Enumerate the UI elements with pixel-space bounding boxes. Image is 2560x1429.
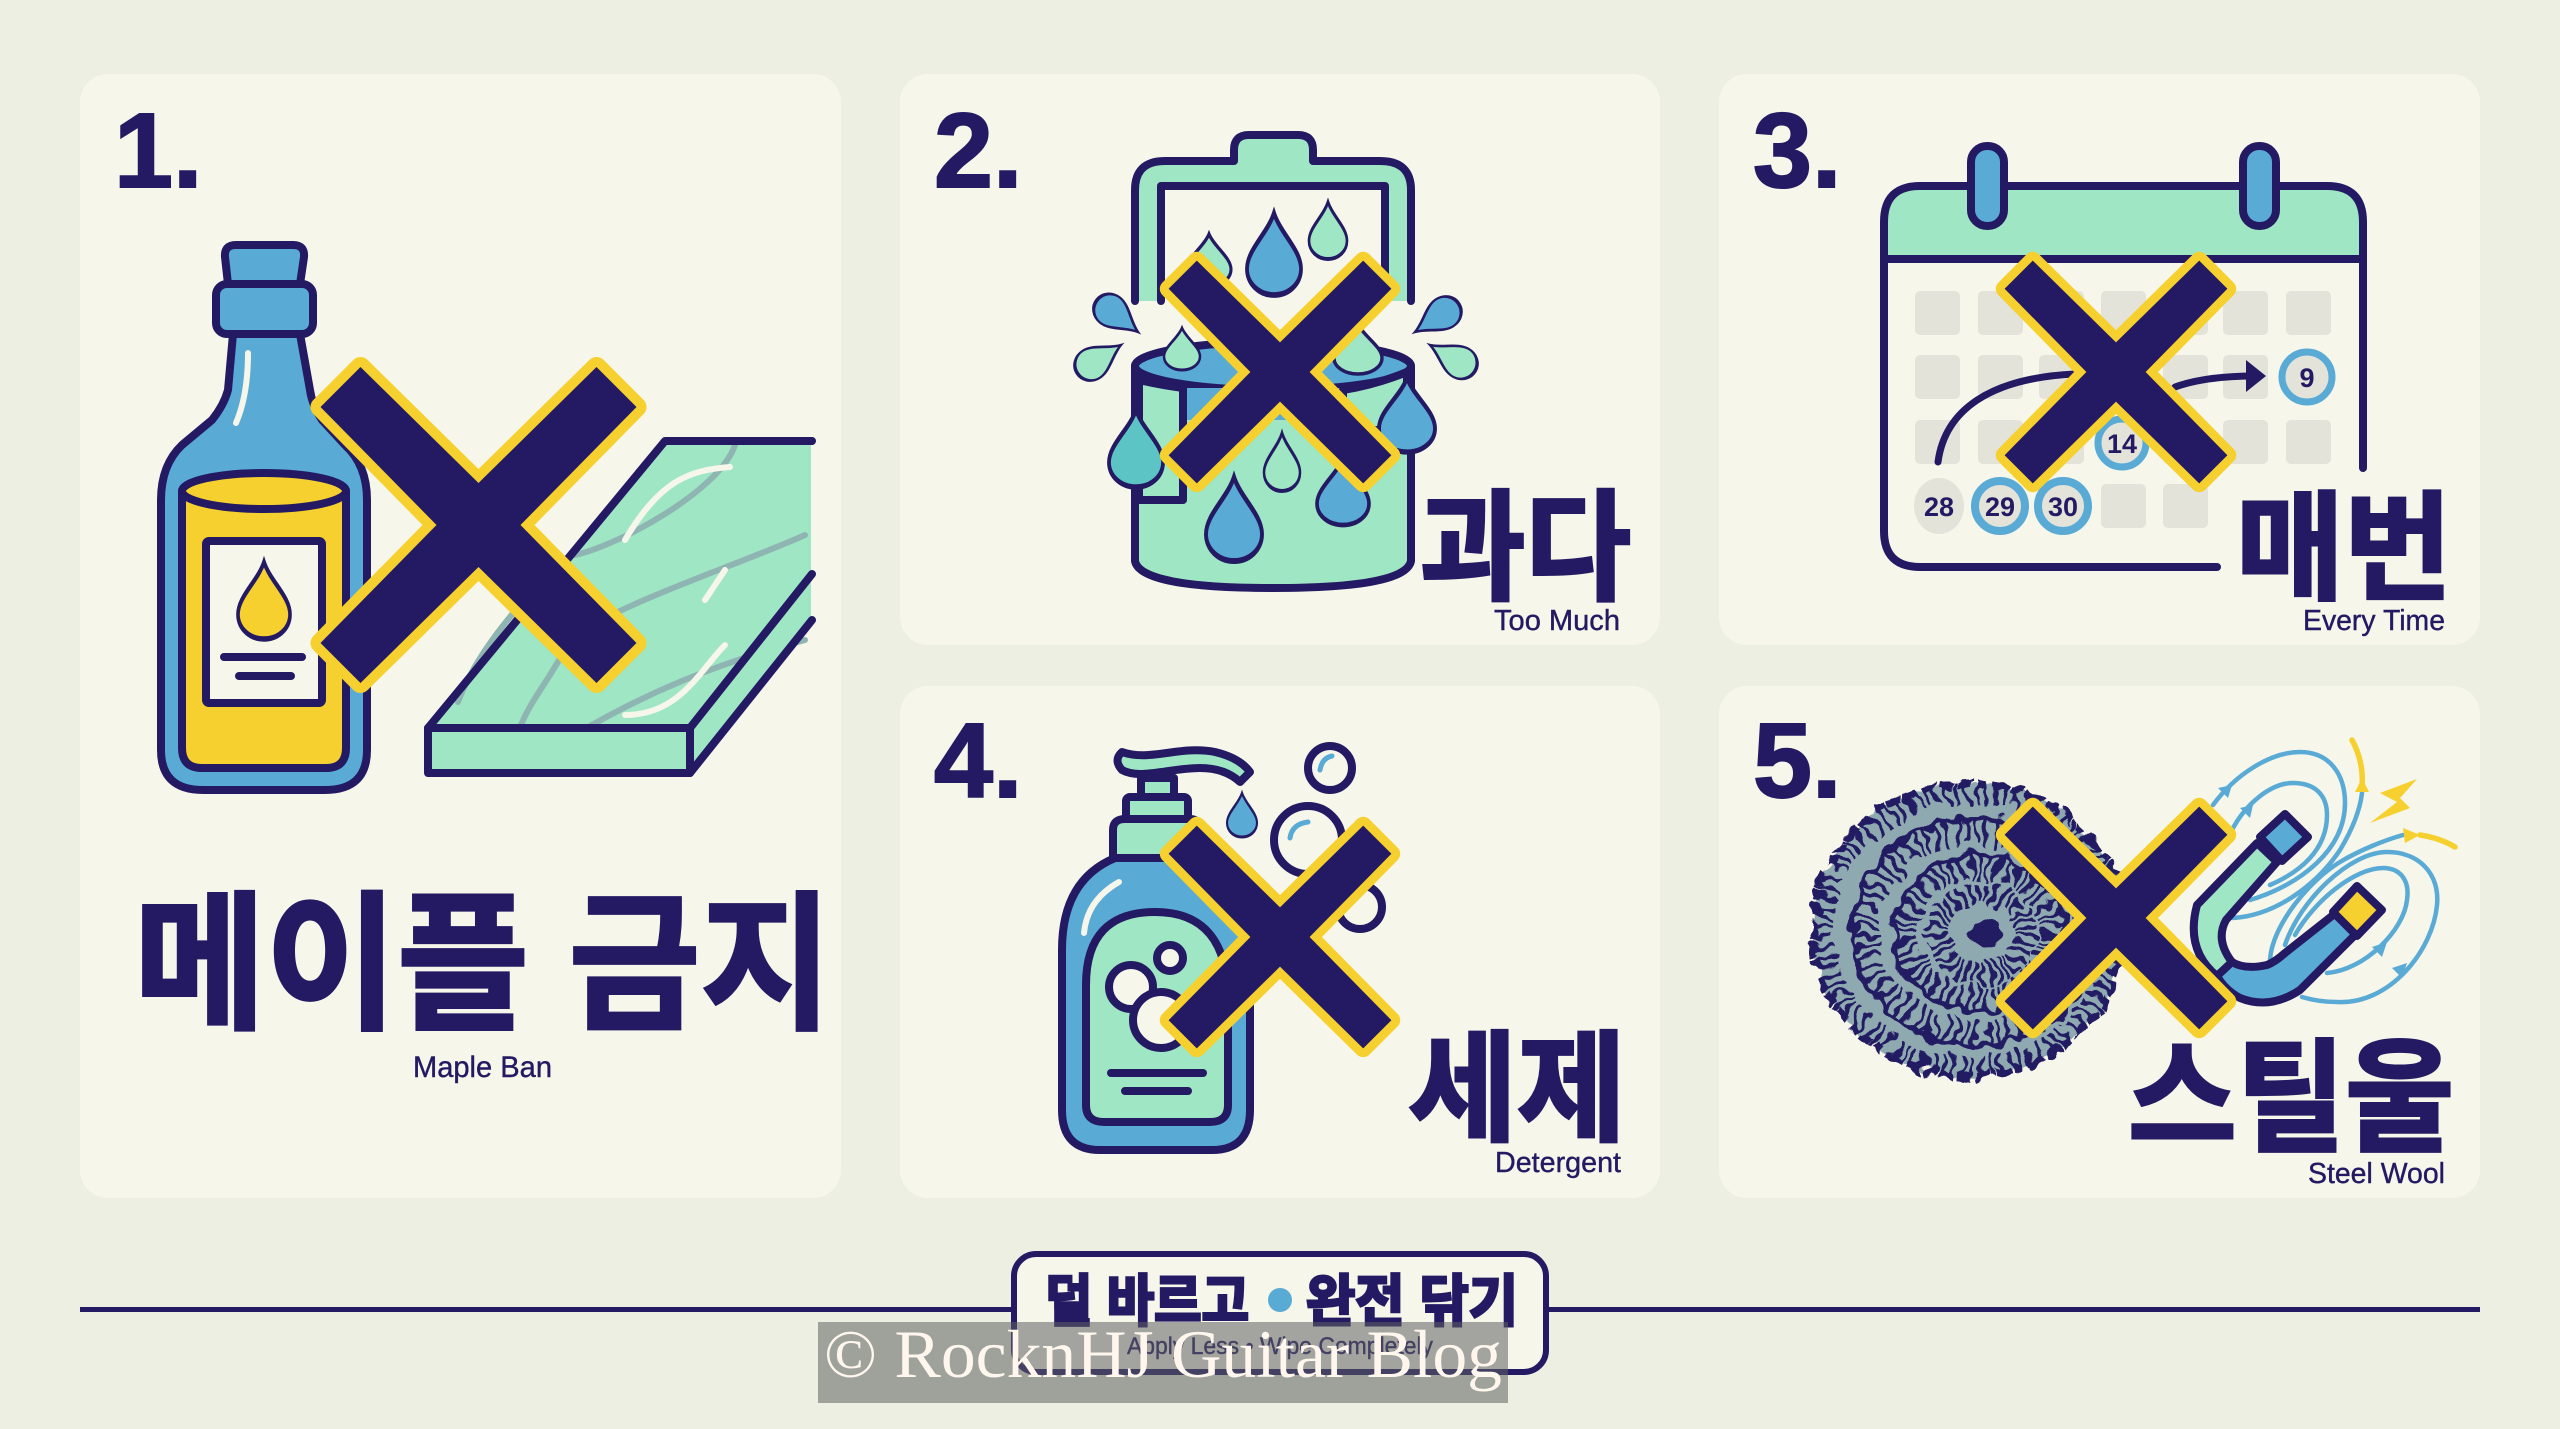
icon: prohibition X [320,367,636,683]
date 14: 14 [2107,429,2137,459]
watermark [818,1316,1508,1403]
panel: detergent [900,686,1660,1198]
icon: oil bottle [161,245,367,790]
caption: Maple Ban: Maple Ban [413,1051,552,1084]
callout heading left: 덜 바르고 [1045,1270,1249,1333]
calendar cells [1915,291,2331,528]
icon: prohibition X [2005,807,2227,1029]
heading: maple ban: 메이플 금지 [134,881,832,1049]
icon: maple plank [428,440,812,773]
heading: detergent: 세제 [1408,1023,1626,1157]
card 4 [900,686,1660,1198]
caption: Too Much: Too Much [1494,605,1620,637]
date 9 [2282,352,2332,402]
date 14 [2098,419,2146,467]
card 5 [1719,686,2480,1198]
icon: magnetic field lines [2213,740,2455,1002]
date 28 [1914,478,1964,534]
date 30 [2038,481,2088,531]
heading: steel wool: 스틸울 [2128,1031,2454,1167]
caption: Detergent: Detergent [1495,1147,1621,1179]
number 1: 1. [114,92,202,210]
card 1 [80,74,841,1198]
icon: prohibition X [1169,826,1391,1048]
number 4: 4. [934,702,1022,820]
icon: magnet [2194,814,2382,1002]
heading: too much: 과다 [1420,482,1631,616]
date 29: 29 [1985,492,2015,522]
callout: apply less, wipe completely [1014,1254,1546,1372]
date 30: 30 [2048,492,2078,522]
number 3: 3. [1753,92,1841,210]
callout caption: Apply Less • Wipe Completely [1127,1333,1433,1360]
watermark text: © RocknHJ Guitar Blog [824,1316,1502,1392]
panel: every time [1719,74,2480,645]
panel: steel wool [1719,686,2480,1198]
panel: maple ban [80,74,841,1198]
icon: prohibition X [1169,261,1391,483]
card 2 [900,74,1660,645]
callout heading right: 완전 닦기 [1306,1270,1518,1333]
date 28: 28 [1924,492,1954,522]
icon: detergent bottle [1062,750,1257,1150]
panel: too much [900,74,1660,645]
heading: every time: 매번 [2236,484,2452,616]
icon: overflowing bottle [1069,135,1483,588]
divider line [80,1307,2480,1312]
arrow: schedule [1938,360,2266,462]
number 2: 2. [934,92,1022,210]
caption: Steel Wool: Steel Wool [2308,1158,2445,1190]
card 3 [1719,74,2480,645]
date 9: 9 [2299,363,2315,393]
icon: calendar [1884,146,2363,567]
caption: Every Time: Every Time [2303,605,2445,637]
icon: prohibition X [2005,261,2227,483]
icon: soap bubbles [1274,746,1382,929]
date 29 [1975,481,2025,531]
callout dot [1268,1288,1292,1312]
number 5: 5. [1753,702,1841,820]
icon: steel wool [1813,784,2125,1076]
